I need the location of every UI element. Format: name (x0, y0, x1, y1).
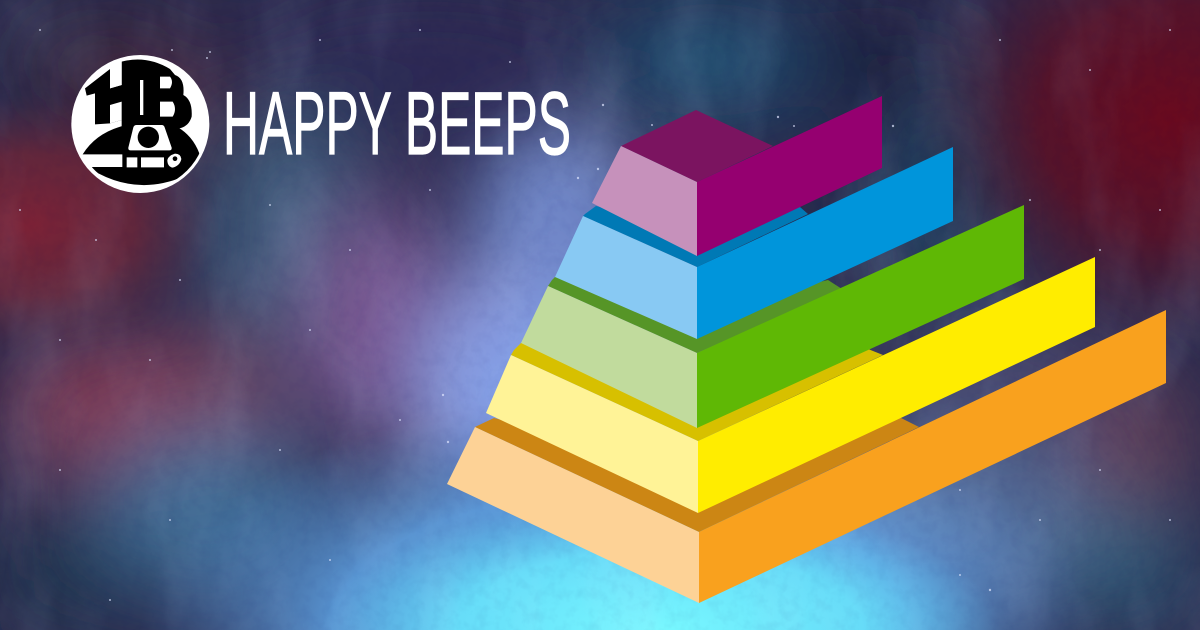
left red glow (0, 95, 220, 355)
pyramid tier 4: yellow (486, 257, 1095, 513)
logo buttons (127, 157, 164, 167)
layered pyramid (447, 96, 1166, 603)
logo tag (167, 154, 181, 168)
upper-right red glow (910, 0, 1200, 350)
logo phone body (128, 125, 172, 150)
pyramid tier 1: purple (592, 96, 882, 256)
horizon glow: blue (140, 400, 1100, 630)
logo white bar (82, 154, 122, 167)
horizon glow: cyan (320, 500, 1000, 630)
pyramid tier 3: green (521, 205, 1024, 428)
pyramid tier 5: orange (447, 310, 1166, 603)
wordmark: HAPPY BEEPS (223, 73, 571, 173)
logo dial (138, 127, 159, 148)
logo dome (83, 125, 199, 185)
pyramid tier 2: blue (555, 147, 953, 339)
logo letters 1HB (85, 60, 192, 129)
logo: HB badge (71, 55, 209, 193)
logo letter counters (110, 60, 175, 123)
